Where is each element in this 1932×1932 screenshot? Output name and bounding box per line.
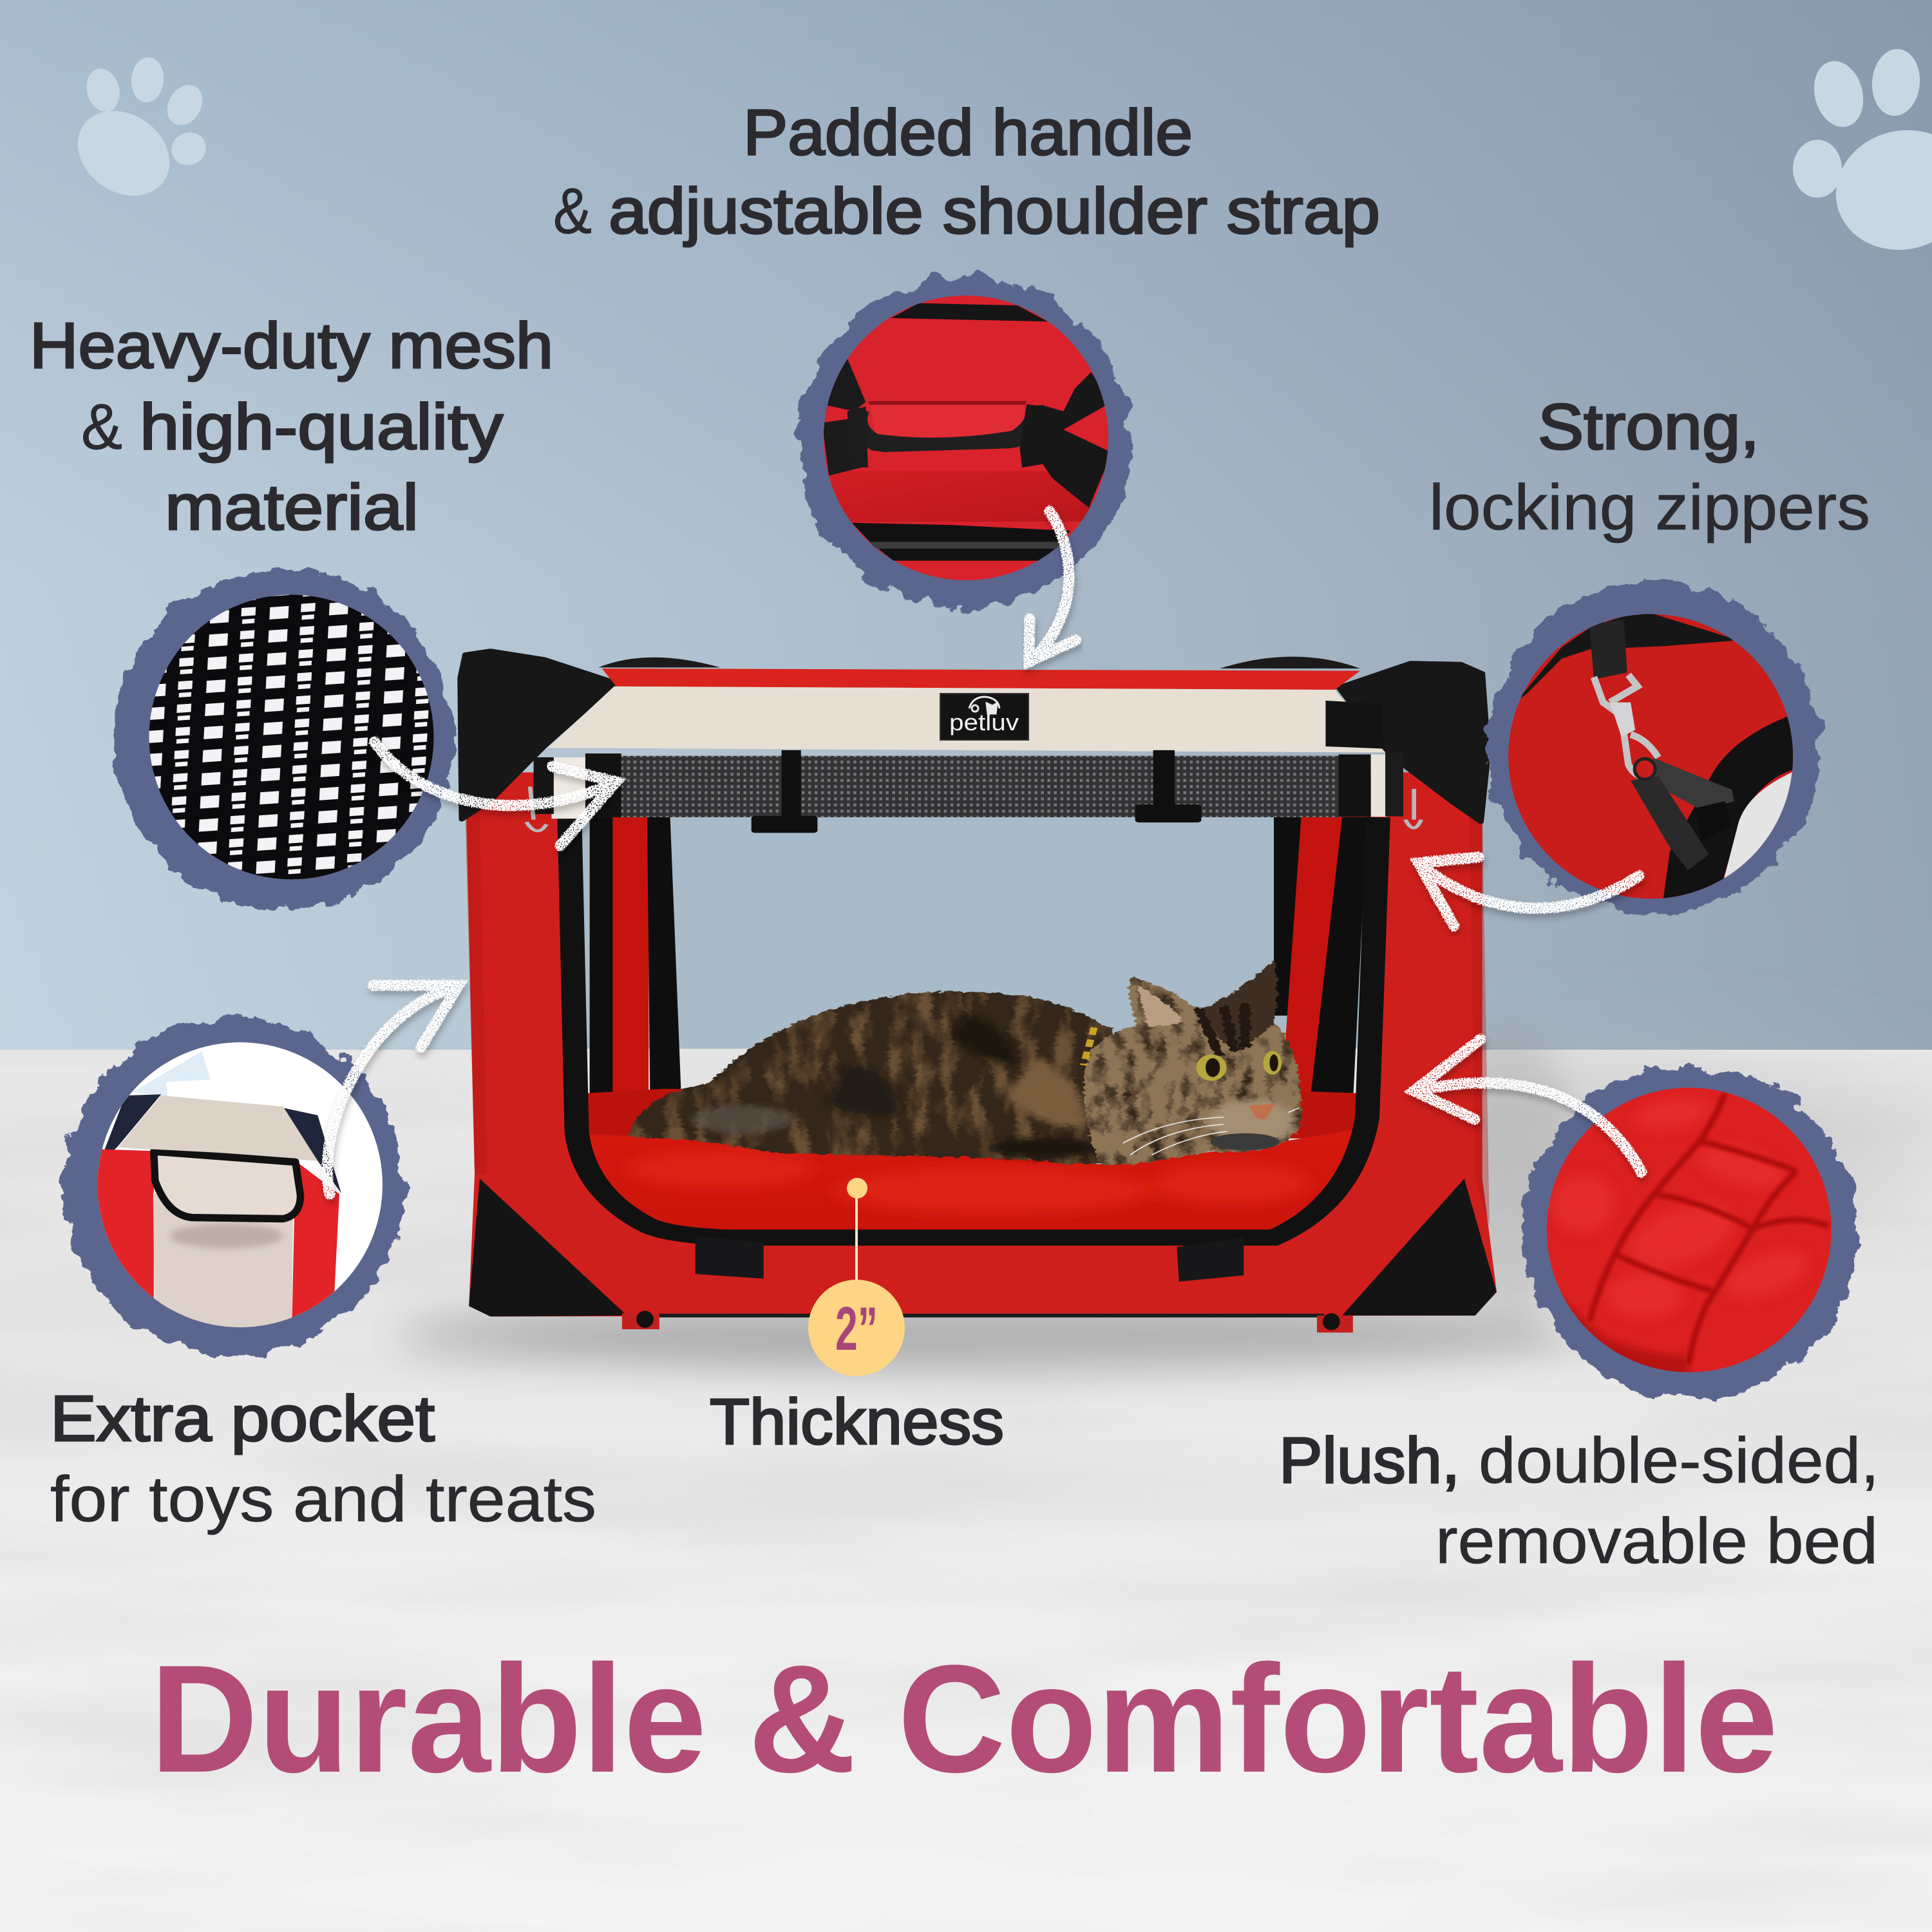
arrow: bed to side — [1414, 1039, 1642, 1172]
heading: plush bed — [1279, 1425, 1879, 1577]
mesh photo — [149, 595, 434, 880]
handle ragged ring — [799, 276, 1132, 608]
heading: extra pocket: for toys and treats — [50, 1463, 596, 1535]
heading: mesh material: high-quality — [140, 391, 503, 463]
arrow: zipper to side — [1419, 857, 1639, 926]
heading: thickness: Thickness — [710, 1386, 1004, 1458]
circle: pocket detail — [59, 1014, 410, 1359]
roll straps and clips — [752, 750, 1201, 833]
heading: locking zippers: locking zippers — [1429, 471, 1870, 544]
mesh roll ends — [534, 753, 1403, 819]
heading: padded handle: adjustable shoulder strap — [609, 175, 1380, 247]
icon: paw print top left — [61, 56, 211, 213]
metal clips — [526, 786, 1421, 831]
pet carrier with cat — [460, 650, 1497, 1332]
marker badge — [808, 1280, 905, 1376]
cat crown and right ear — [1198, 961, 1278, 1054]
bed front cushion — [577, 1117, 1368, 1238]
bed soft highlights — [627, 1150, 1310, 1214]
circle: handle detail — [792, 264, 1153, 625]
cat — [629, 961, 1301, 1166]
marker value: 2” — [835, 1294, 878, 1363]
zipper photo — [1508, 614, 1793, 899]
arrow: pocket to side — [327, 985, 459, 1194]
background: marble floor — [0, 1024, 1932, 1932]
circle: bed detail — [1521, 1063, 1861, 1402]
heading: plush bed: double-sided, — [1479, 1425, 1879, 1497]
heading: locking zippers: Strong, — [1538, 391, 1759, 463]
heading: plush bed: removable bed — [1435, 1505, 1878, 1577]
velcro left — [696, 1236, 764, 1279]
top black corner right — [1338, 663, 1488, 822]
background: wall — [0, 0, 1932, 1051]
marker dot — [847, 1178, 867, 1198]
heading: padded handle: & — [553, 175, 592, 247]
heading: mesh material: Heavy-duty mesh — [30, 310, 553, 382]
shoulder strap — [1381, 714, 1482, 763]
circle: mesh detail — [113, 569, 453, 909]
heading: plush bed: Plush, — [1279, 1425, 1460, 1497]
zipper ragged ring — [1487, 582, 1819, 914]
heading: mesh material: & — [81, 391, 122, 463]
bed ragged ring — [1523, 1065, 1858, 1399]
carrier back handles — [598, 657, 1360, 668]
zipper frame — [569, 817, 1378, 1238]
arrow: mesh to roll — [375, 742, 616, 846]
cat inner ear — [1137, 985, 1184, 1027]
cat forehead stripes — [1198, 1004, 1245, 1056]
logo icon — [969, 697, 999, 714]
buckle — [1325, 701, 1385, 749]
carrier side shading — [466, 800, 1490, 1226]
circle: zipper detail — [1483, 578, 1826, 916]
heading: extra pocket — [50, 1383, 596, 1535]
cat whiskers — [1123, 1108, 1299, 1155]
arrow: handle to top — [1029, 511, 1076, 661]
heading: padded handle — [553, 97, 1380, 247]
heading: extra pocket: Extra pocket — [50, 1383, 435, 1455]
inner side panel right — [1274, 817, 1367, 1103]
inner side panel left — [590, 817, 681, 1096]
top black corner left — [460, 650, 616, 820]
corner black bottom right — [1342, 1179, 1497, 1316]
cat collar — [1083, 1027, 1094, 1065]
floor seen through opening — [580, 1048, 1364, 1143]
title: Durable & Comfortable — [150, 1634, 1778, 1804]
cat chin — [1211, 1133, 1280, 1150]
heading: mesh material — [30, 310, 553, 544]
cat muzzle — [1209, 1099, 1296, 1144]
corner black bottom left — [469, 1179, 627, 1316]
thickness marker — [808, 1178, 905, 1376]
mesh roll — [616, 756, 1342, 817]
pocket ragged ring — [64, 1017, 404, 1357]
cat eyes — [1197, 1051, 1282, 1081]
cat head — [1084, 961, 1301, 1166]
cat body — [629, 992, 1137, 1164]
carrier red body — [466, 772, 1497, 1316]
cat body markings — [692, 1013, 1101, 1159]
top red strip — [602, 668, 1360, 690]
bed back — [580, 1089, 1367, 1139]
heading: mesh material: material — [165, 471, 419, 544]
marker line — [855, 1195, 858, 1291]
icon: paw print top right — [1793, 47, 1932, 265]
heading: padded handle: Padded handle — [743, 97, 1193, 169]
bottom edge and feet — [622, 1311, 1353, 1332]
mesh ragged ring — [113, 569, 453, 909]
handle photo — [823, 295, 1108, 580]
beige roll-up flap — [548, 687, 1385, 753]
logo patch — [940, 694, 1028, 740]
pocket photo — [98, 1042, 383, 1327]
logo wordmark: petluv — [949, 709, 1019, 735]
velcro right — [1177, 1238, 1244, 1282]
heading: locking zippers — [1429, 391, 1870, 544]
cat nose — [1249, 1104, 1275, 1119]
opening showing wall and floor — [573, 817, 1371, 1224]
bed photo — [1507, 1056, 1868, 1417]
